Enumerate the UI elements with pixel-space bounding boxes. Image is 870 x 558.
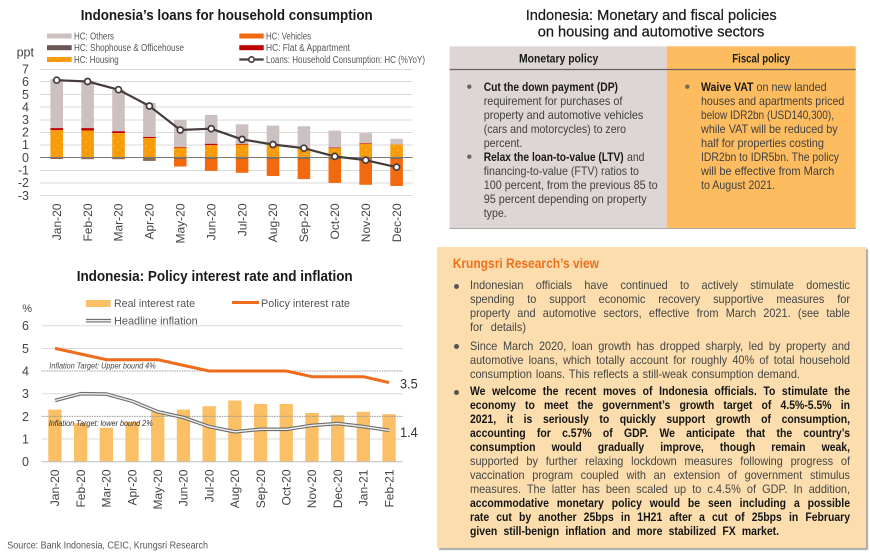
x axis: months: Dec-20	[331, 469, 345, 508]
x axis: months: Jan-20	[50, 203, 64, 240]
column: monetary policy	[450, 46, 667, 228]
title: policies panel: Indonesia: Monetary and fiscal policies	[526, 7, 777, 24]
legend: loans chart: HC: Housing	[74, 55, 119, 66]
column: fiscal policy: Fiscal policy	[732, 52, 790, 66]
y axis: percent: %	[22, 303, 32, 315]
line: policy interest rate	[55, 348, 389, 383]
y axis: percent: 0	[22, 455, 29, 469]
text block: second bullet: consumption loans. This reflects a still-weak consumption demand.	[470, 367, 800, 381]
title: loans chart: Indonesia’s loans for household consumption	[81, 7, 373, 24]
text block: first bullet: spending to support economic recovery supportive measures for	[470, 292, 850, 306]
text block: first bullet: property and automotive sectors, effective from March 2021. (see table	[470, 306, 850, 320]
y axis: ppt: -2	[18, 176, 29, 190]
x axis: months: Mar-20	[100, 469, 114, 508]
y axis: percent: 3	[22, 387, 29, 401]
y axis: percent	[22, 303, 32, 469]
text block: third bullet: 2021, it is seriously to quickly support growth of consumption,	[470, 412, 850, 426]
column: monetary policy: 100 percent, from the previous 85 to	[484, 178, 658, 192]
value label: inflation: 1.4	[400, 424, 418, 440]
column: fiscal policy: houses and apartments priced	[701, 94, 844, 108]
column: fiscal policy: below IDR2bn (USD140,300),	[701, 108, 834, 122]
text block: third bullet: economy to meet the government’s growth target of 4.5%-5.5% in	[470, 398, 850, 412]
column: monetary policy: Relax the loan-to-value (LTV)	[484, 150, 624, 164]
line: household consumption loans %YoY	[54, 77, 400, 170]
x axis: months: Sep-20	[254, 469, 268, 508]
text block: third bullet: accounting for c.57% of GDP. We anticipate that the country’s	[470, 426, 850, 440]
legend: policy rate chart: Policy interest rate	[261, 298, 350, 310]
text block: first bullet	[454, 278, 850, 334]
column: monetary policy: percent.	[484, 136, 522, 150]
x axis: months: Dec-20	[390, 203, 404, 242]
column: monetary policy: requirement for purchases of	[484, 94, 623, 108]
column: fiscal policy: half for properties costing	[701, 136, 824, 150]
y axis: ppt: 5	[22, 88, 29, 102]
x axis: months: Jul-20	[202, 469, 216, 502]
x axis: months: Aug-20	[228, 469, 242, 508]
bars: others	[50, 79, 403, 148]
bars: housing	[50, 130, 403, 158]
text block: third bullet: given still-benign inflation and more stabilized FX market.	[470, 524, 779, 538]
x axis: months: Apr-20	[143, 203, 157, 240]
y axis: ppt: -3	[18, 189, 29, 203]
y axis: ppt: ppt	[17, 46, 35, 60]
annotation: inflation target lower bound: Inflation Target: lower bound 2%	[49, 419, 153, 428]
value label: policy rate: 3.5	[400, 375, 418, 391]
x axis: months	[48, 469, 396, 510]
chart: Indonesia policy interest rate and inflation	[7, 268, 418, 552]
bars: flat and apartment	[50, 128, 372, 148]
y axis: ppt	[17, 46, 35, 203]
annotation: inflation target upper bound: Inflation Target: Upper bound 4%	[49, 362, 156, 370]
y axis: ppt: 2	[22, 126, 29, 140]
x axis: months: Apr-20	[125, 469, 139, 506]
text block: first bullet: for details)	[470, 320, 526, 334]
x axis: months: Oct-20	[328, 203, 342, 240]
x axis: months: Jul-20	[235, 203, 249, 236]
text block: third bullet: vaccination program coupled with an extension of government stimulus	[470, 468, 850, 482]
column: fiscal policy: while VAT will be reduced by	[700, 122, 838, 136]
y axis: ppt: 4	[22, 100, 29, 114]
legend: loans chart: HC: Others	[74, 32, 114, 42]
column: monetary policy: Cut the down payment (DP)	[484, 80, 618, 94]
legend: policy rate chart	[86, 298, 350, 328]
y axis: percent: 6	[22, 319, 29, 333]
text block: second bullet	[454, 339, 850, 381]
x axis: months	[50, 203, 404, 244]
heading: view panel: Krungsri Research’s view	[453, 256, 599, 271]
y axis: percent: 1	[22, 432, 29, 446]
y axis: ppt: 7	[22, 62, 29, 76]
y axis: ppt: 3	[22, 113, 29, 127]
x axis: months: Aug-20	[266, 203, 280, 242]
title: policies panel	[526, 7, 777, 40]
title: policies panel: on housing and automotive sectors	[538, 24, 764, 40]
x axis: months: Nov-20	[359, 203, 373, 242]
x axis: months: Feb-20	[74, 469, 88, 508]
x axis: months: Feb-20	[81, 203, 95, 242]
y axis: percent: 4	[22, 364, 29, 378]
legend: loans chart: HC: Shophouse & Officehouse	[74, 43, 184, 54]
x axis: months: May-20	[174, 203, 188, 244]
column: fiscal policy: to August 2021.	[701, 178, 775, 192]
legend: policy rate chart: Real interest rate	[114, 298, 195, 310]
y axis: ppt: 6	[22, 75, 29, 89]
column: monetary policy: financing-to-value (FTV) ratios to	[484, 164, 639, 178]
x axis: months: Mar-20	[112, 203, 126, 242]
x axis: months: Nov-20	[305, 469, 319, 508]
text block: third bullet	[454, 384, 850, 538]
x axis: months: Jan-21	[357, 469, 371, 506]
bars: shophouse and officehouse	[50, 158, 403, 161]
chart: Indonesia's loans for household consumption	[17, 7, 425, 244]
line: headline inflation	[55, 394, 389, 432]
text block: first bullet: Indonesian officials have continued to actively stimulate domestic	[470, 278, 850, 292]
y axis: ppt: -1	[18, 164, 29, 178]
panel: monetary and fiscal policies	[450, 7, 856, 229]
x axis: months: Jun-20	[177, 469, 191, 506]
title: policy rate chart: Indonesia: Policy interest rate and inflation	[77, 268, 353, 285]
column: fiscal policy: on new landed	[756, 80, 827, 94]
column: monetary policy: (cars and motorcycles) to zero	[484, 122, 626, 136]
column: monetary policy: type.	[484, 206, 507, 220]
column: fiscal policy	[667, 46, 856, 228]
text block: third bullet: consumption would gradually improve, though remain weak,	[470, 440, 850, 454]
x axis: months: May-20	[151, 469, 165, 510]
legend: loans chart: HC: Vehicles	[266, 32, 311, 42]
text block: third bullet: supported by further relaxing lockdown measures following progress of	[470, 454, 850, 468]
column: fiscal policy: Waive VAT	[701, 80, 754, 94]
text block: third bullet: rate cut by another 25bps in 1H21 after a cut of 25bps in February	[470, 510, 850, 524]
source note: Source: Bank Indonesia, CEIC, Krungsri Research	[7, 540, 208, 552]
text block: third bullet: We welcome the recent moves of Indonesia officials. To stimulate the	[470, 384, 850, 398]
y axis: percent: 5	[22, 342, 29, 356]
text block: second bullet: automotive loans, which totally account for roughly 40% of total household	[470, 353, 850, 367]
panel: Krungsri Research's view	[437, 247, 866, 548]
bars: real interest rate	[48, 400, 396, 462]
legend: loans chart	[47, 32, 425, 66]
column: monetary policy: Monetary policy	[519, 52, 599, 66]
legend: loans chart: HC: Flat & Appartment	[266, 43, 350, 54]
column: fiscal policy: will be effective from March	[700, 164, 834, 178]
y axis: ppt: 0	[22, 151, 29, 165]
column: monetary policy: and	[627, 150, 644, 164]
column: fiscal policy: IDR2bn to IDR5bn. The policy	[701, 150, 839, 164]
column: monetary policy: property and automotive vehicles	[484, 108, 643, 122]
x axis: months: Jun-20	[204, 203, 218, 240]
x axis: months: Feb-21	[382, 469, 396, 508]
bars: vehicles	[174, 159, 403, 186]
x axis: months: Oct-20	[280, 469, 294, 506]
x axis: months: Sep-20	[297, 203, 311, 242]
y axis: ppt: 1	[22, 138, 29, 152]
text block: third bullet: accommodative monetary policy would be seen including a possible	[470, 496, 850, 510]
legend: policy rate chart: Headline inflation	[114, 316, 198, 328]
column: monetary policy: 95 percent depending on property	[484, 192, 647, 206]
y axis: percent: 2	[22, 410, 29, 424]
x axis: months: Jan-20	[48, 469, 62, 506]
text block: third bullet: measures. The latter has been scaled up to c.4.5% of GDP. In addition,	[470, 482, 850, 496]
text block: second bullet: Since March 2020, loan growth has dropped sharply, led by property and	[470, 339, 850, 353]
